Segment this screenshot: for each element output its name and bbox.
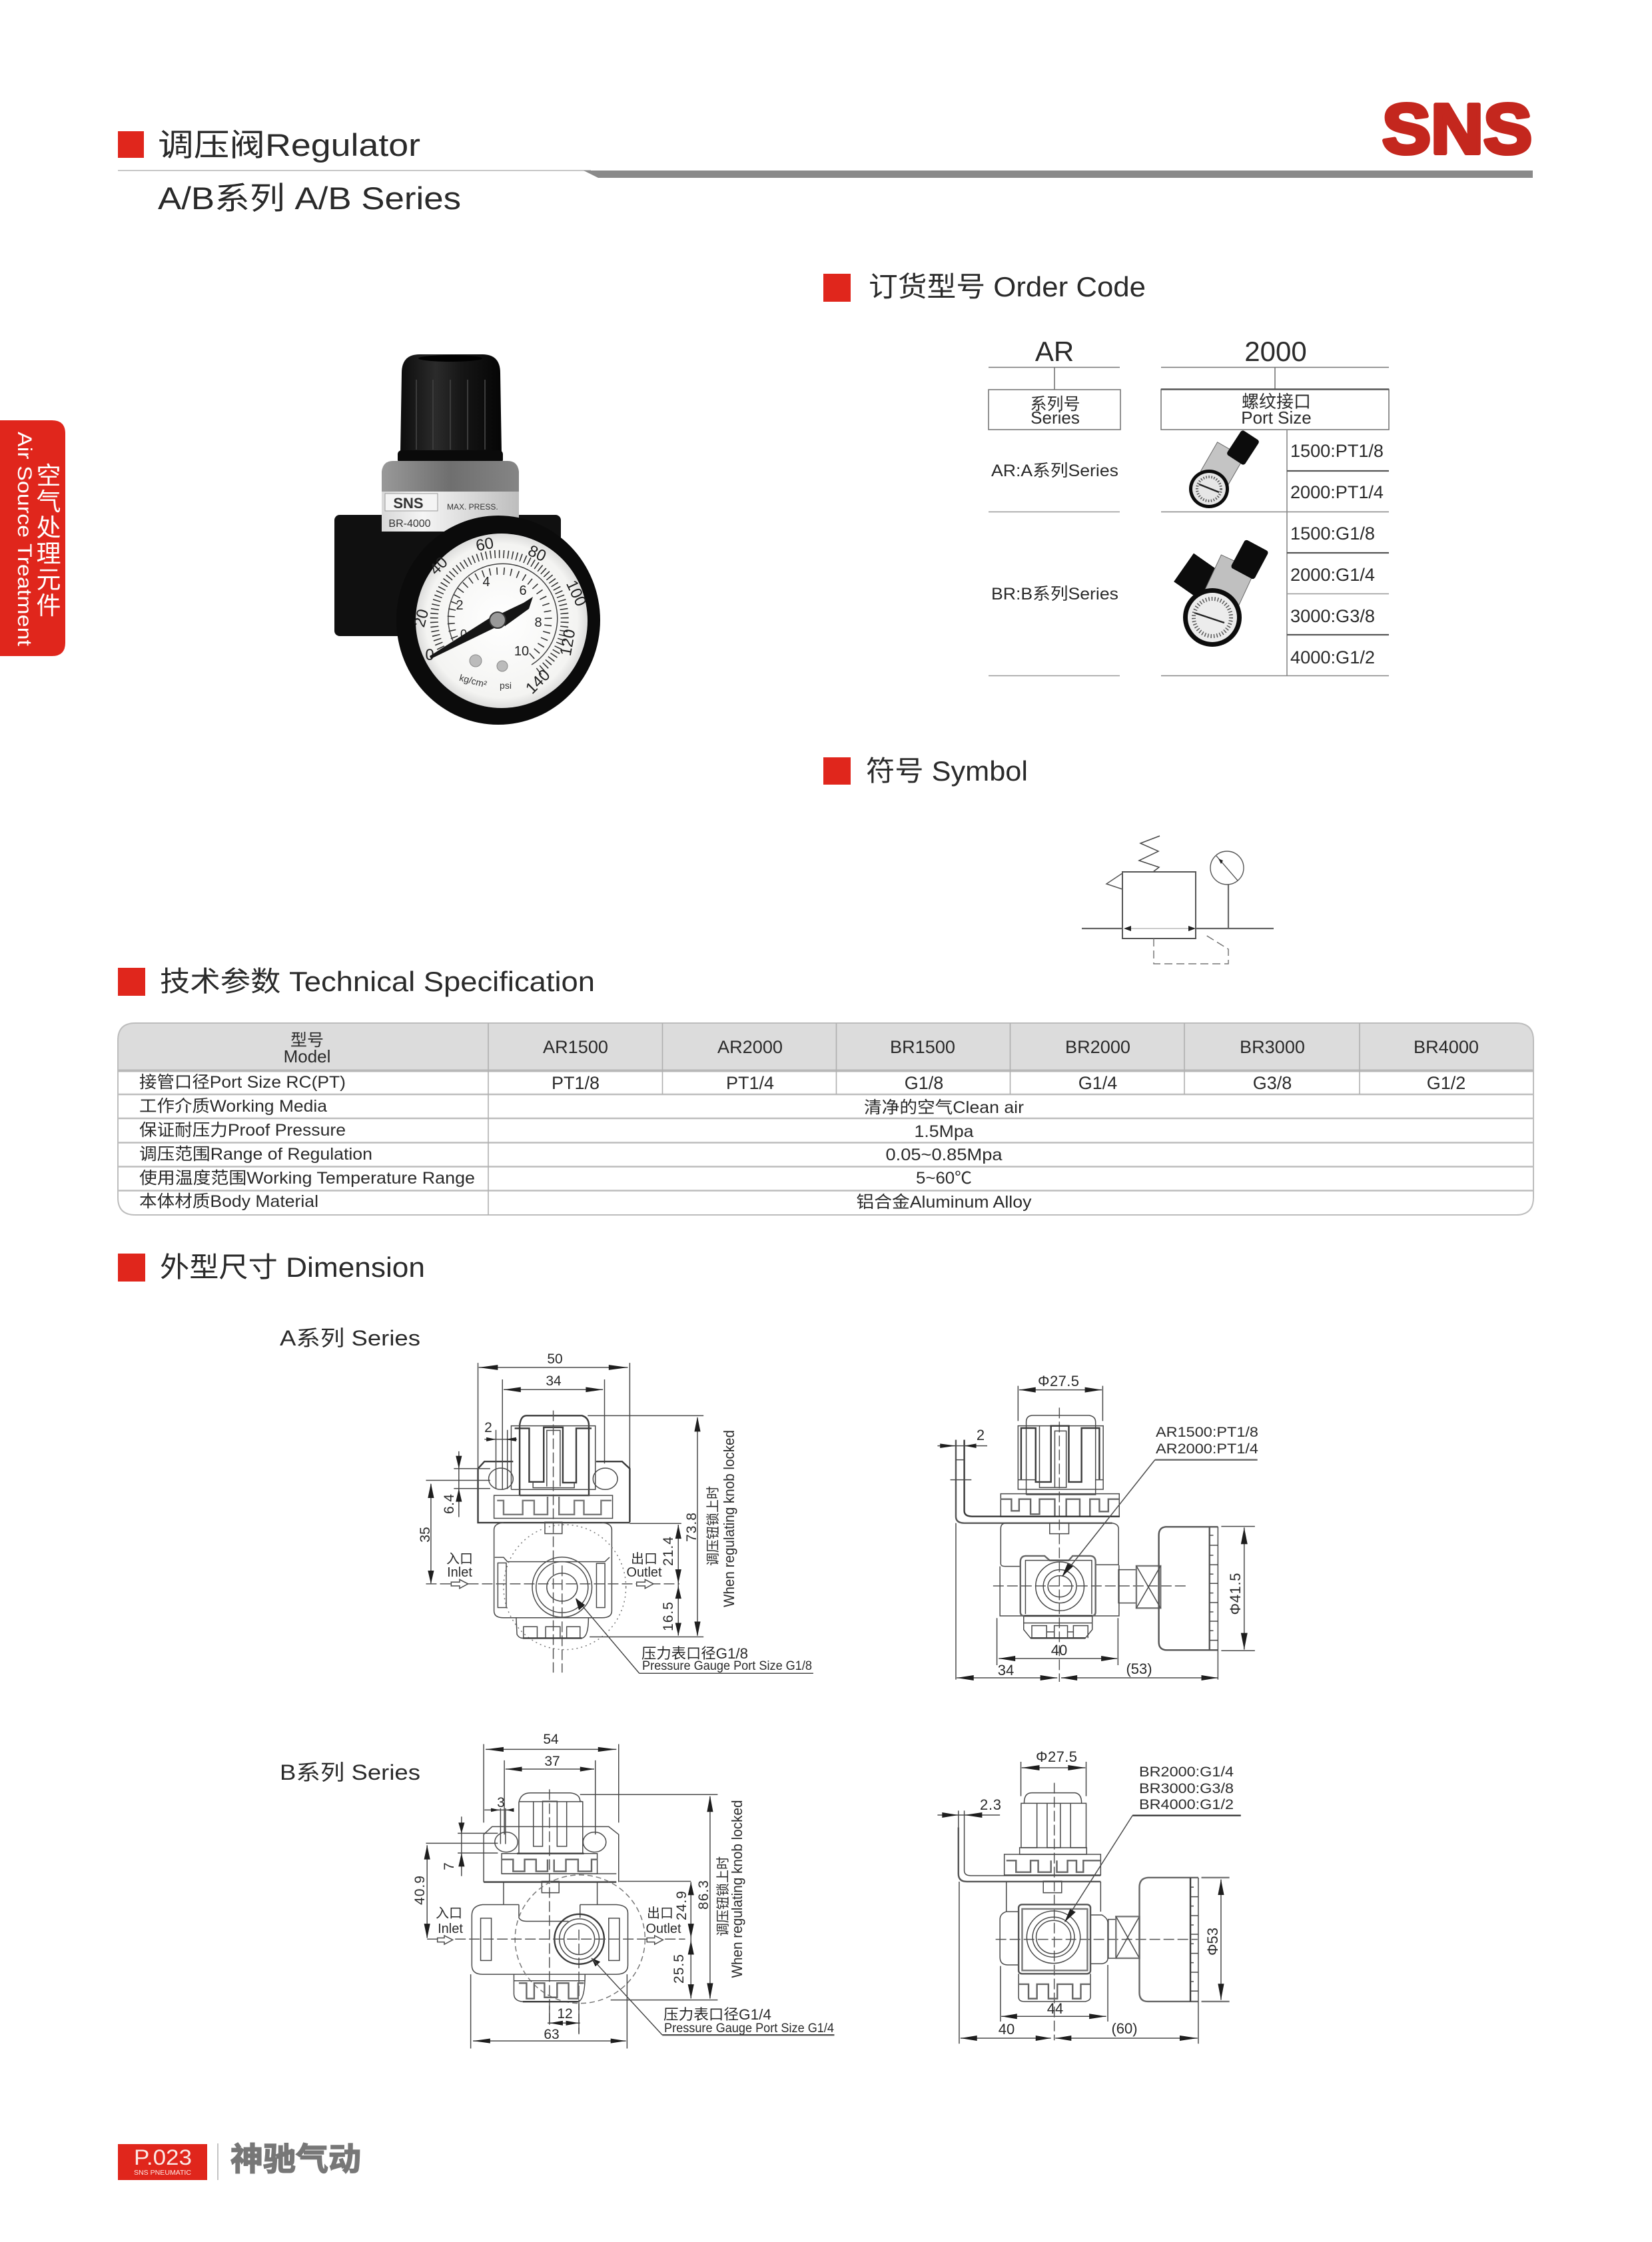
footer: page number badge (118, 2144, 207, 2180)
row values: 1.5Mpa (914, 1122, 974, 1141)
A front dimension labels: 出口 (631, 1551, 657, 1567)
pressure gauge: 140 (522, 666, 554, 697)
A front dimension labels: Pressure Gauge Port Size G1/8 (642, 1659, 812, 1673)
A side dimension labels: AR2000:PT1/4 (1156, 1441, 1258, 1457)
row labels (139, 1073, 475, 1211)
heading: technical specification: 技术参数 Technical Specification (160, 966, 595, 997)
B front dimension labels: 86.3 (696, 1880, 711, 1910)
pilot line (1154, 934, 1228, 964)
drawing: B series side view (937, 1748, 1241, 2044)
heading: symbol: 符号 Symbol (866, 755, 1028, 787)
pressure gauge: psi (500, 680, 512, 691)
valve box (1122, 872, 1196, 938)
A side dimension labels (977, 1373, 1258, 1679)
B front dimension labels (412, 1732, 834, 2042)
pressure gauge: 20 (410, 607, 432, 629)
pressure gauge: 0 (425, 646, 434, 664)
port size options: 4000:G1/2 (1290, 647, 1375, 667)
code segment: AR (989, 336, 1120, 430)
row labels: 调压范围Range of Regulation (139, 1145, 372, 1164)
spring (1139, 836, 1160, 872)
B side dimension labels: Φ27.5 (1036, 1748, 1077, 1765)
B side dimension labels: Φ53 (1204, 1928, 1221, 1956)
B front dimension labels: Inlet (438, 1922, 463, 1936)
A front dimension labels: 35 (418, 1527, 433, 1543)
header labels: Model (284, 1046, 330, 1066)
A front dimension labels: 6.4 (442, 1494, 457, 1514)
row values: PT1/4 (726, 1073, 774, 1093)
port size options: 3000:G3/8 (1290, 606, 1375, 626)
pneumatic symbol diagram (1082, 836, 1274, 964)
footer: page number badge: P.023 (134, 2145, 192, 2169)
A front dimension labels: Inlet (447, 1565, 472, 1580)
B front dimension labels: 25.5 (671, 1954, 687, 1984)
pressure gauge: 0 (460, 627, 467, 641)
side tab chinese label: 气 (36, 488, 61, 516)
A front dimension labels: 压力表口径G1/8 (641, 1645, 748, 1662)
B front dimension labels: 调压钮锁上时 (715, 1856, 731, 1936)
label band: BR-4000 (388, 518, 431, 530)
header labels: AR1500 (543, 1037, 608, 1057)
row values (552, 1073, 1465, 1212)
series options: AR:A系列Series (991, 462, 1118, 480)
B front dimension labels: 54 (543, 1732, 559, 1747)
grey collar (382, 461, 519, 492)
row values: G1/4 (1078, 1073, 1117, 1093)
A side dimension labels: 2 (977, 1427, 985, 1443)
header labels: BR3000 (1240, 1037, 1305, 1057)
drawing: A series side view (937, 1373, 1258, 1682)
code segment: AR: Series (1031, 408, 1080, 428)
series options: BR:B系列Series (991, 585, 1118, 603)
order code chart (989, 336, 1389, 675)
B front dimension labels: Pressure Gauge Port Size G1/4 (664, 2022, 834, 2036)
pressure gauge: 8 (534, 615, 542, 630)
row values: 5~60℃ (916, 1169, 972, 1188)
technical specification table (118, 1023, 1533, 1215)
B front dimension labels: 12 (557, 2006, 573, 2022)
A side dimension labels: Φ41.5 (1227, 1573, 1244, 1615)
header labels: BR4000 (1414, 1037, 1479, 1057)
row labels: 接管口径Port Size RC(PT) (139, 1073, 346, 1092)
B front dimension labels: 40.9 (412, 1876, 428, 1905)
title marker square (118, 131, 144, 158)
pressure gauge: 60 (474, 534, 495, 555)
pressure gauge (396, 516, 600, 725)
A front dimension labels: 34 (546, 1373, 562, 1389)
A side dimension labels: 40 (1051, 1642, 1067, 1659)
label band: MAX. PRESS. (447, 502, 498, 512)
side tab chinese label: 处 (36, 514, 61, 542)
side tab: air source treatment (0, 420, 65, 656)
port size options: 1500:PT1/8 (1290, 441, 1384, 461)
pressure gauge: 4 (482, 575, 490, 589)
row values: 铝合金Aluminum Alloy (857, 1193, 1032, 1212)
header labels: 型号 (290, 1031, 324, 1050)
port size options: 1500:G1/8 (1290, 524, 1375, 544)
B side dimension labels: 44 (1047, 2000, 1063, 2017)
side tab chinese label: 理 (36, 540, 61, 567)
side tab english label: Air Source Treatment (13, 432, 35, 647)
side tab chinese label: 空 (36, 462, 61, 490)
A front dimension labels: 50 (547, 1351, 563, 1367)
product thumbnail: A series (1189, 430, 1260, 508)
product photo: regulator with gauge (334, 354, 600, 725)
row values: PT1/8 (552, 1073, 600, 1093)
row labels: 使用温度范围Working Temperature Range (139, 1169, 475, 1188)
pressure gauge: 6 (519, 583, 527, 598)
adjusting knob (398, 354, 503, 464)
A front linework (426, 1363, 813, 1673)
code segment: AR: AR (1035, 336, 1074, 367)
code segment: 2000: 2000 (1244, 336, 1307, 367)
A front dimension labels: 调压钮锁上时 (705, 1486, 721, 1566)
footer: brand name: 神驰气动 (230, 2142, 361, 2177)
B front dimension labels: 出口 (647, 1906, 673, 1921)
footer: page number badge: SNS PNEUMATIC (134, 2169, 191, 2177)
row values: G1/8 (905, 1073, 943, 1093)
A front dimension labels: 入口 (446, 1552, 473, 1567)
row values: 0.05~0.85Mpa (886, 1146, 1003, 1164)
B front dimension labels: Outlet (646, 1922, 681, 1936)
B front dimension labels: 入口 (436, 1906, 462, 1921)
pressure gauge: 2 (456, 598, 464, 613)
title: regulator: 调压阀Regulator (158, 127, 420, 163)
label band: SNS (393, 495, 424, 512)
header labels (284, 1031, 1479, 1066)
B side dimension labels: BR3000:G3/8 (1139, 1781, 1234, 1796)
B front dimension labels: 压力表口径G1/4 (663, 2006, 771, 2023)
header labels: AR2000 (717, 1037, 783, 1057)
row values: 清净的空气Clean air (864, 1098, 1024, 1117)
A front dimension labels: When regulating knob locked (721, 1430, 737, 1607)
header labels: BR2000 (1065, 1037, 1130, 1057)
B side dimension labels: (60) (1111, 2020, 1138, 2037)
A front dimension labels (418, 1351, 812, 1673)
code segment: AR: 系列号 (1030, 395, 1080, 414)
code segment: 2000: 螺纹接口 (1242, 392, 1311, 412)
B front linework (424, 1744, 834, 2049)
title block (118, 127, 461, 216)
A front dimension labels: 2 (484, 1420, 492, 1435)
row values: G3/8 (1253, 1073, 1292, 1093)
port size options: 2000:G1/4 (1290, 565, 1375, 585)
A side dimension labels: AR1500:PT1/8 (1156, 1425, 1258, 1440)
B front dimension labels: 63 (544, 2027, 560, 2042)
A front dimension labels: 21.4 (661, 1537, 676, 1566)
port size options (1161, 430, 1389, 675)
A side dimension labels: (53) (1126, 1661, 1152, 1677)
label: B series: B系列 Series (280, 1760, 420, 1784)
brand logo: SNS: SNS (1382, 90, 1532, 169)
B front dimension labels: When regulating knob locked (729, 1800, 745, 1978)
heading: order code: 订货型号 Order Code (869, 271, 1146, 302)
label band (382, 492, 519, 532)
regulator body block (334, 515, 561, 636)
A side dimension labels: Φ27.5 (1038, 1373, 1079, 1389)
A side linework (937, 1386, 1258, 1682)
A front dimension labels: 16.5 (661, 1602, 676, 1631)
row values: G1/2 (1427, 1073, 1465, 1093)
side tab chinese label: 元 (36, 566, 61, 593)
code segment: 2000: Port Size (1241, 408, 1312, 428)
A side dimension labels: 34 (998, 1662, 1014, 1679)
B side dimension labels: 2.3 (980, 1796, 1001, 1813)
pressure gauge: 10 (514, 644, 529, 659)
header rule (118, 170, 1533, 178)
row labels: 工作介质Working Media (139, 1097, 327, 1116)
B side dimension labels: BR4000:G1/2 (1139, 1797, 1234, 1812)
pressure gauge: 120 (557, 628, 579, 657)
table header row (118, 1023, 1533, 1070)
B front dimension labels: 7 (442, 1862, 457, 1870)
drawing: B series front view (412, 1732, 834, 2049)
pressure gauge: 40 (426, 554, 452, 579)
product thumbnail: B series (1174, 539, 1269, 647)
heading: dimension: 外型尺寸 Dimension (160, 1252, 425, 1283)
pressure gauge: 100 (562, 577, 590, 609)
label: A series: A系列 Series (280, 1326, 420, 1350)
B side dimension labels: BR2000:G1/4 (1139, 1764, 1234, 1780)
series options (989, 462, 1120, 675)
row labels: 保证耐压力Proof Pressure (139, 1121, 346, 1140)
gauge symbol (1210, 851, 1244, 885)
A front dimension labels: Outlet (626, 1565, 662, 1580)
B front dimension labels: 3 (497, 1795, 505, 1810)
B front dimension labels: 37 (544, 1754, 560, 1769)
table frame and grid (118, 1023, 1533, 1215)
B side linework (937, 1762, 1241, 2044)
code segment: 2000 (1161, 336, 1389, 430)
pressure gauge: kg/cm² (458, 672, 488, 689)
pressure gauge: 80 (525, 542, 549, 565)
B side dimension labels: 40 (999, 2021, 1015, 2038)
subtitle: A/B series: A/B系列 A/B Series (158, 181, 461, 216)
header labels: BR1500 (890, 1037, 955, 1057)
drawing: A series front view (418, 1351, 813, 1673)
side tab chinese label: 件 (36, 592, 61, 619)
port size options: 2000:PT1/4 (1290, 482, 1384, 502)
flow line (1082, 885, 1274, 929)
row labels: 本体材质Body Material (139, 1192, 318, 1211)
A front dimension labels: 73.8 (684, 1513, 699, 1542)
B side dimension labels (980, 1748, 1234, 2038)
B front dimension labels: 24.9 (674, 1891, 689, 1920)
